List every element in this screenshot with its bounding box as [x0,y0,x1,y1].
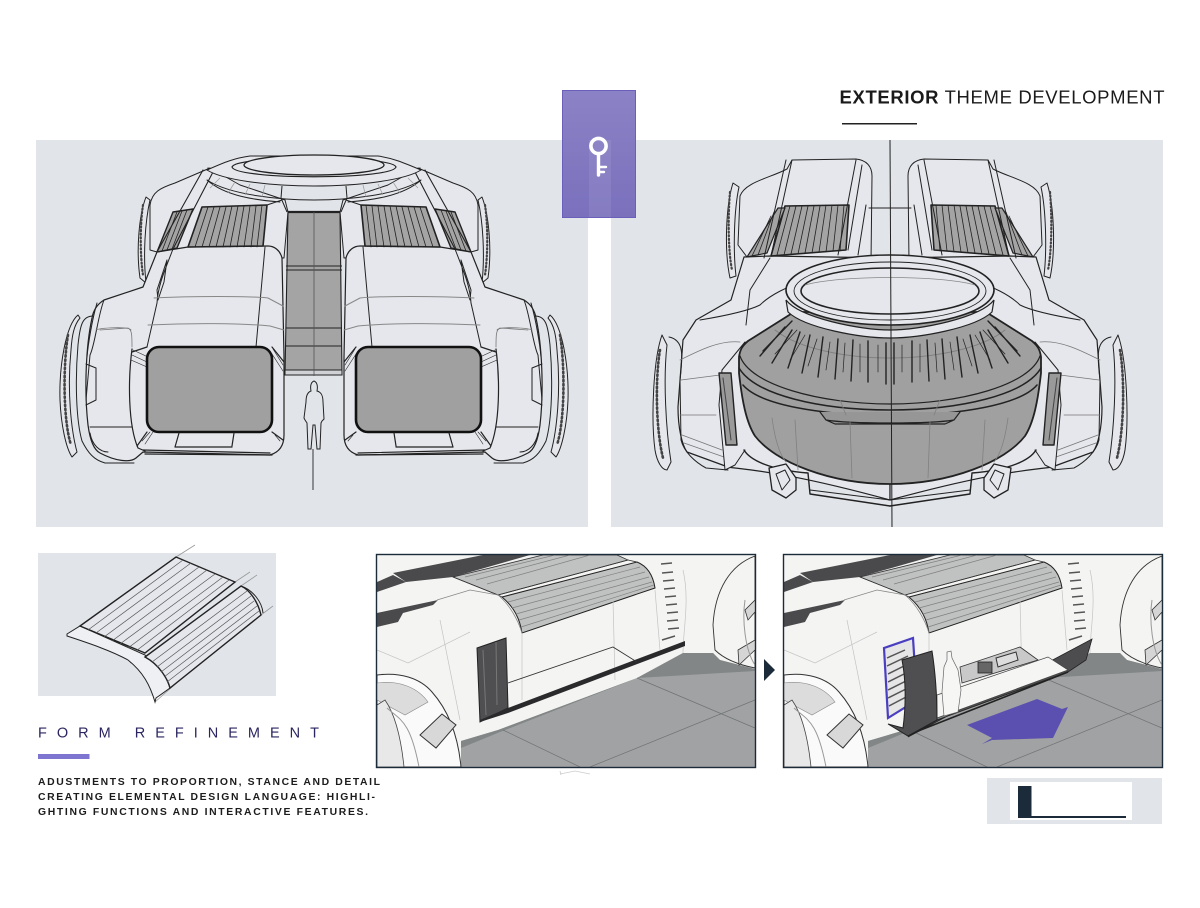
car half: left side [60,168,288,463]
fins: mirrored right [894,321,1020,384]
panel: front view sketch [36,140,588,527]
roof slat panel one [80,557,235,653]
rear wheel [713,556,755,668]
icon: key [591,138,606,175]
title underline [842,123,917,124]
side sill and door seam [480,641,685,722]
frame [784,554,1162,768]
closed door recess [477,638,508,722]
accent bar [38,754,90,759]
dome at rear [207,155,421,212]
vehicle body base [784,555,1162,767]
centre line [890,140,892,527]
body text: CREATING ELEMENTAL DESIGN LANGUAGE: HIGHLI- [38,792,376,803]
fins: left [760,321,886,384]
arrow between views [764,659,775,681]
faint construction marks [560,771,590,775]
interior recess with controls [960,647,1038,683]
front wheel [377,674,461,767]
centre walkway [285,212,342,376]
panel: form refinement roof detail [38,545,276,702]
human figure scale [304,381,324,490]
vehicle body base [377,555,755,767]
purple direction arrow [967,699,1068,744]
roof lip [67,626,170,702]
panel: rear view sketch [611,140,1163,527]
body text: GHTING FUNCTIONS AND INTERACTIVE FEATURES. [38,807,368,818]
panel: door closed view [376,554,756,768]
car half: mirrored rear view [890,159,1127,506]
panel: door open view [783,554,1163,768]
rear pod top ring [786,255,994,338]
car half: left side rear view [653,159,890,506]
car half: mirrored right side [340,168,568,463]
fold-out tray [908,639,1092,737]
bottle [942,651,961,716]
roof slat panel two [145,586,263,688]
open doorway with blue frame [884,638,917,718]
body text [38,777,381,818]
key tab [562,90,636,218]
gray rear pod [739,312,1041,484]
title: EXTERIOR THEME DEVELOPMENT [840,86,1164,108]
heading: form refinement: FORM REFINEMENT [38,726,319,742]
construction lines [130,545,273,702]
open door panel [888,651,937,736]
body text: ADUSTMENTS TO PROPORTION, STANCE AND DETAIL [38,777,381,788]
legend box [987,778,1162,824]
louvres [661,563,679,640]
frame [376,554,756,768]
